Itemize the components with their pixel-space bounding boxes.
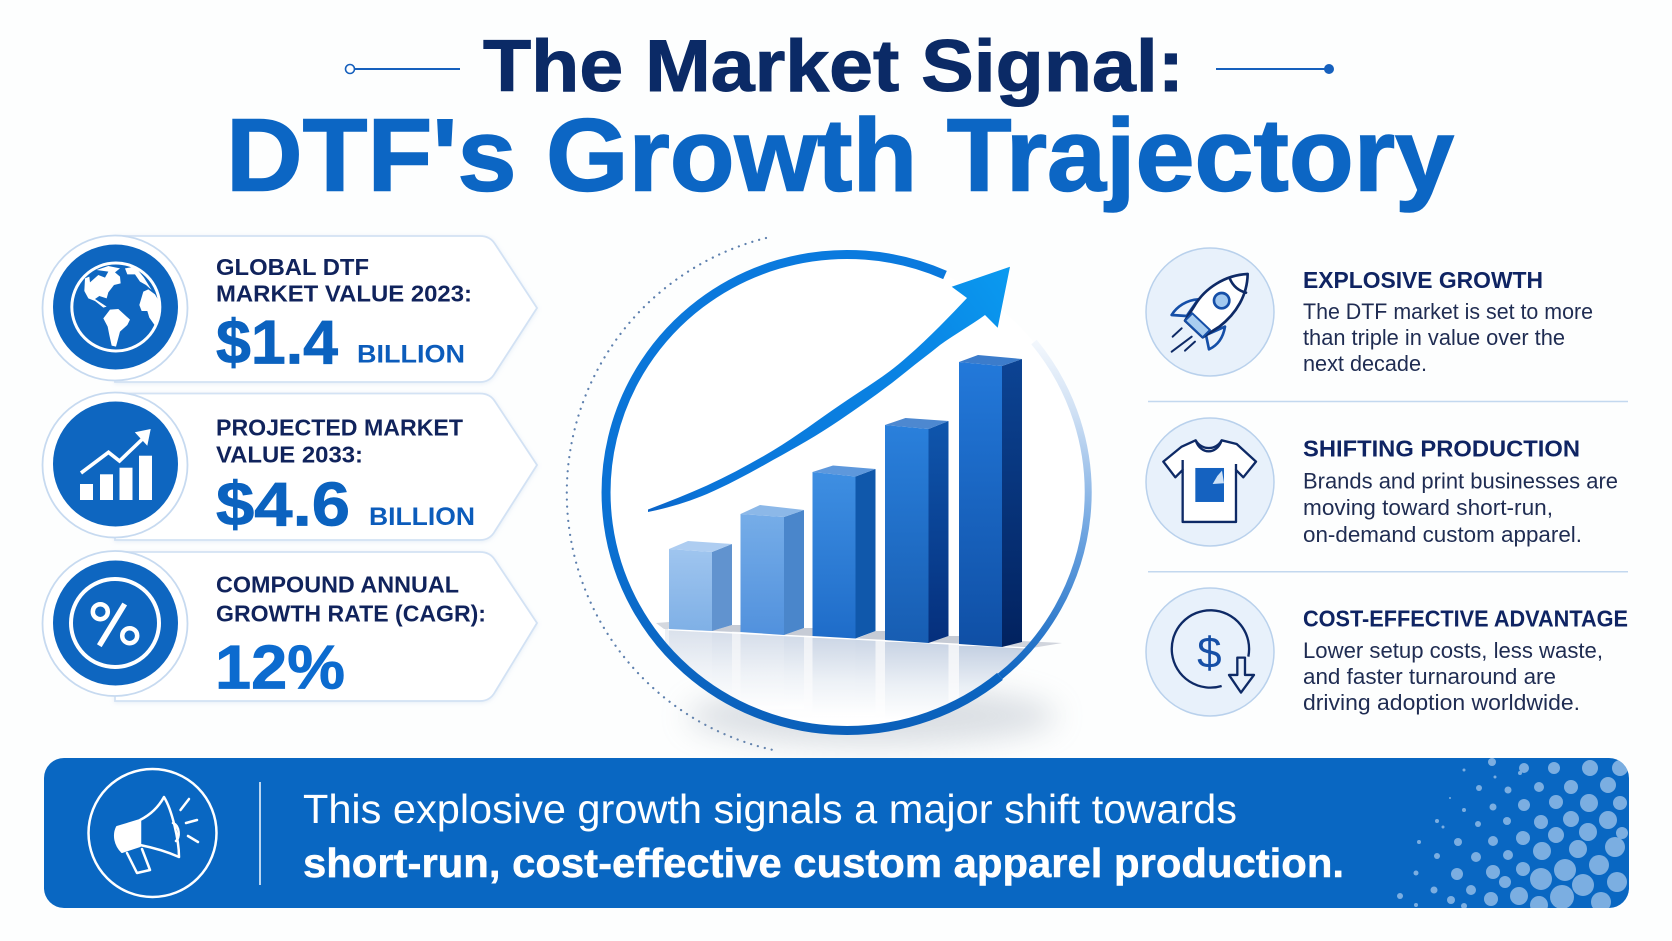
bar 5 xyxy=(959,355,1022,647)
circular ring xyxy=(606,254,1088,730)
icon: dollar with down arrow: $ xyxy=(1197,628,1222,677)
title ornament left xyxy=(346,64,460,74)
bar 2 xyxy=(740,505,804,635)
stat label: GLOBAL DTF xyxy=(216,254,369,280)
text: explosive growth xyxy=(1303,267,1593,376)
icon: globe xyxy=(72,263,160,351)
stat unit: BILLION xyxy=(357,341,465,369)
dotted orbit xyxy=(567,238,778,751)
panel: cost-effective advantage xyxy=(1146,588,1628,716)
stat label: VALUE 2033: xyxy=(216,441,363,467)
stat unit: BILLION xyxy=(369,503,475,531)
text: cost-effective advantage xyxy=(1303,606,1628,715)
text: cost-effective advantage: Lower setup costs, less waste, xyxy=(1303,638,1603,663)
text: shifting production: moving toward short-run, xyxy=(1303,495,1553,520)
panel: shifting production xyxy=(1146,418,1618,547)
stat label xyxy=(216,572,486,627)
title line 2: DTF's Growth Trajectory xyxy=(226,98,1454,212)
icon: rocket xyxy=(1146,248,1274,376)
stat label xyxy=(216,415,464,467)
stat label: PROJECTED MARKET xyxy=(216,415,464,441)
stat value: 12% xyxy=(215,633,345,702)
panel: global market value 2023 xyxy=(42,236,537,382)
text: explosive growth: The DTF market is set to more xyxy=(1303,299,1593,324)
title line 1: The Market Signal: xyxy=(483,26,1184,107)
icon: percent xyxy=(71,579,159,667)
bar 1 xyxy=(669,541,732,631)
text: explosive growth: next decade. xyxy=(1303,351,1427,376)
stat value: $1.4 xyxy=(216,308,339,377)
title ornament right xyxy=(1216,64,1334,74)
banner xyxy=(44,758,1629,914)
text: shifting production xyxy=(1303,436,1618,547)
panel: projected market value 2033 xyxy=(42,392,537,540)
text: shifting production: on-demand custom apparel. xyxy=(1303,522,1582,547)
text: cost-effective advantage: COST-EFFECTIVE ADVANTAGE xyxy=(1303,606,1628,632)
text: explosive growth: than triple in value over the xyxy=(1303,325,1565,350)
text: shifting production: Brands and print businesses are xyxy=(1303,469,1618,494)
text: shifting production: SHIFTING PRODUCTION xyxy=(1303,436,1580,462)
title xyxy=(226,26,1454,212)
floor and reflection xyxy=(656,622,1062,706)
central growth chart xyxy=(567,238,1088,751)
icon: megaphone xyxy=(88,769,216,897)
panel: explosive growth xyxy=(1146,248,1593,376)
bar 3 xyxy=(812,466,876,638)
icon: t-shirt xyxy=(1146,418,1274,546)
stat label xyxy=(216,254,472,307)
stat label: COMPOUND ANNUAL xyxy=(216,572,459,598)
chart shadow xyxy=(687,686,1057,746)
panel: CAGR xyxy=(42,551,537,702)
text: cost-effective advantage: and faster turnaround are xyxy=(1303,664,1556,689)
halftone dots xyxy=(1397,758,1628,914)
banner text: This explosive growth signals a major shift towards xyxy=(303,786,1237,832)
stat value: $4.6 xyxy=(216,471,350,540)
growth arrow xyxy=(648,267,1010,512)
icon: dollar with down arrow xyxy=(1146,588,1274,716)
text: explosive growth: EXPLOSIVE GROWTH xyxy=(1303,267,1543,293)
icon: rising bar chart xyxy=(80,429,152,500)
banner text xyxy=(303,786,1344,886)
stat label: GROWTH RATE (CAGR): xyxy=(216,601,486,627)
banner text: short-run, cost-effective custom apparel production. xyxy=(303,840,1344,886)
text: cost-effective advantage: driving adoption worldwide. xyxy=(1303,690,1580,715)
stat label: MARKET VALUE 2023: xyxy=(216,281,472,307)
bar 4 xyxy=(885,418,948,643)
